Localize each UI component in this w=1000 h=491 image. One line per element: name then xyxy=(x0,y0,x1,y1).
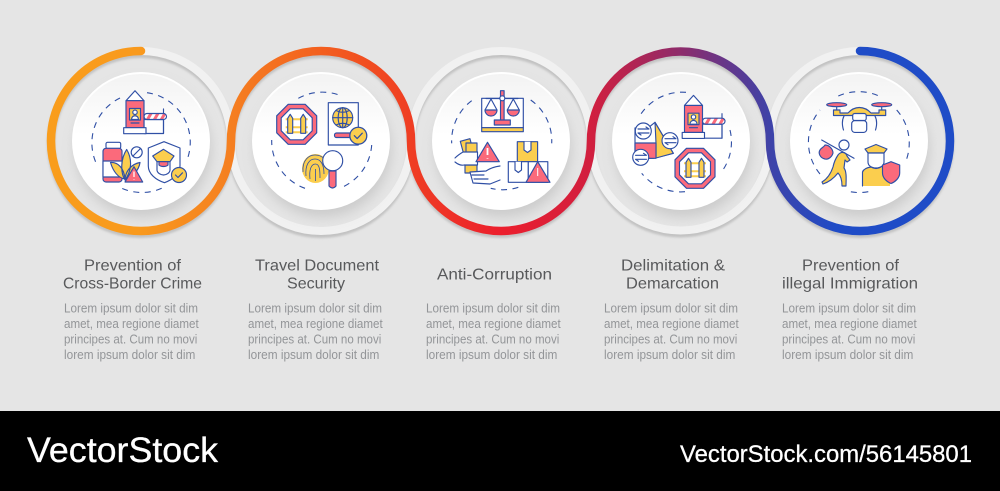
heading: Prevention of xyxy=(84,258,182,274)
dashed ring 4 xyxy=(638,92,731,192)
text: illegal immigration xyxy=(782,258,918,362)
icon: bribe hands xyxy=(455,139,500,184)
body: Lorem ipsum dolor sit dim xyxy=(782,301,916,315)
panel: travel document security xyxy=(252,72,390,210)
dashed ring 2 xyxy=(272,92,372,188)
body xyxy=(248,301,383,362)
heading: Prevention of xyxy=(802,258,900,274)
body: Lorem ipsum dolor sit dim xyxy=(604,301,738,315)
icon: warning triangle xyxy=(476,142,499,162)
body: principes at. Cum no movi xyxy=(604,332,737,346)
panel: cross-border crime xyxy=(72,72,210,210)
icon: territory map xyxy=(635,122,673,158)
body: principes at. Cum no movi xyxy=(248,332,381,346)
heading: Delimitation & xyxy=(621,258,725,274)
heading xyxy=(63,258,202,292)
footer band xyxy=(0,411,1000,491)
icon: border post xyxy=(682,95,725,138)
body: lorem ipsum dolor sit dim xyxy=(782,348,913,362)
body xyxy=(604,301,739,362)
body: lorem ipsum dolor sit dim xyxy=(64,348,195,362)
heading: Cross-Border Crime xyxy=(63,276,202,292)
icon: forbidden sign xyxy=(131,147,142,158)
text: delimitation and demarcation xyxy=(604,258,739,362)
icon: warning triangle xyxy=(125,167,143,182)
inner disc shadows xyxy=(75,81,929,217)
heading: Anti-Corruption xyxy=(437,266,552,284)
footer logo: VectorStock xyxy=(27,431,219,470)
icon: hemp leaf xyxy=(110,150,140,180)
icon: fence stop sign xyxy=(675,148,715,188)
icon: running migrant xyxy=(819,140,854,186)
body: lorem ipsum dolor sit dim xyxy=(248,348,379,362)
panel: delimitation and demarcation xyxy=(612,72,750,210)
icon: passport xyxy=(328,103,367,145)
icon: border post xyxy=(124,91,166,134)
icon: fingerprint xyxy=(302,154,329,183)
dashed ring 3 xyxy=(452,100,552,190)
body xyxy=(426,301,561,362)
heading: Travel Document xyxy=(255,258,380,274)
icon: exchange arrows xyxy=(633,123,678,165)
icon: magnifier xyxy=(323,151,343,188)
heading: illegal Immigration xyxy=(782,276,918,292)
icon: fence stop sign xyxy=(277,104,317,144)
icon: pill jar xyxy=(103,142,122,182)
heading: Security xyxy=(287,276,345,292)
body: principes at. Cum no movi xyxy=(782,332,915,346)
heading: Demarcation xyxy=(626,276,719,292)
footer image id: VectorStock.com/56145801 xyxy=(680,441,972,468)
body: principes at. Cum no movi xyxy=(426,332,559,346)
body: Lorem ipsum dolor sit dim xyxy=(248,301,382,315)
light ring track xyxy=(141,51,860,231)
icon: drone xyxy=(827,103,892,132)
body: amet, mea regione diamet xyxy=(64,317,199,331)
icon: parcels xyxy=(508,142,550,182)
heading xyxy=(255,258,380,292)
body: Lorem ipsum dolor sit dim xyxy=(64,301,198,315)
icon: law book and scales xyxy=(482,91,523,132)
body: principes at. Cum no movi xyxy=(64,332,197,346)
body: amet, mea regione diamet xyxy=(426,317,561,331)
ring shadows xyxy=(51,54,950,234)
body: amet, mea regione diamet xyxy=(248,317,383,331)
body: lorem ipsum dolor sit dim xyxy=(604,348,735,362)
body xyxy=(782,301,917,362)
panel: illegal immigration xyxy=(790,72,928,210)
body: Lorem ipsum dolor sit dim xyxy=(426,301,560,315)
coloured ribbon xyxy=(51,51,950,231)
body: amet, mea regione diamet xyxy=(604,317,739,331)
icon: border officer xyxy=(862,144,900,186)
body xyxy=(64,301,199,362)
panel: anti-corruption xyxy=(432,72,570,210)
heading xyxy=(621,258,725,292)
icon: officer shield xyxy=(148,142,186,183)
dashed ring 1 xyxy=(92,93,190,192)
text: cross-border crime xyxy=(63,258,202,362)
text: anti-corruption xyxy=(426,266,561,362)
dashed ring 5 xyxy=(808,92,909,193)
body: amet, mea regione diamet xyxy=(782,317,917,331)
heading xyxy=(782,258,918,292)
body: lorem ipsum dolor sit dim xyxy=(426,348,557,362)
text: travel document security xyxy=(248,258,383,362)
